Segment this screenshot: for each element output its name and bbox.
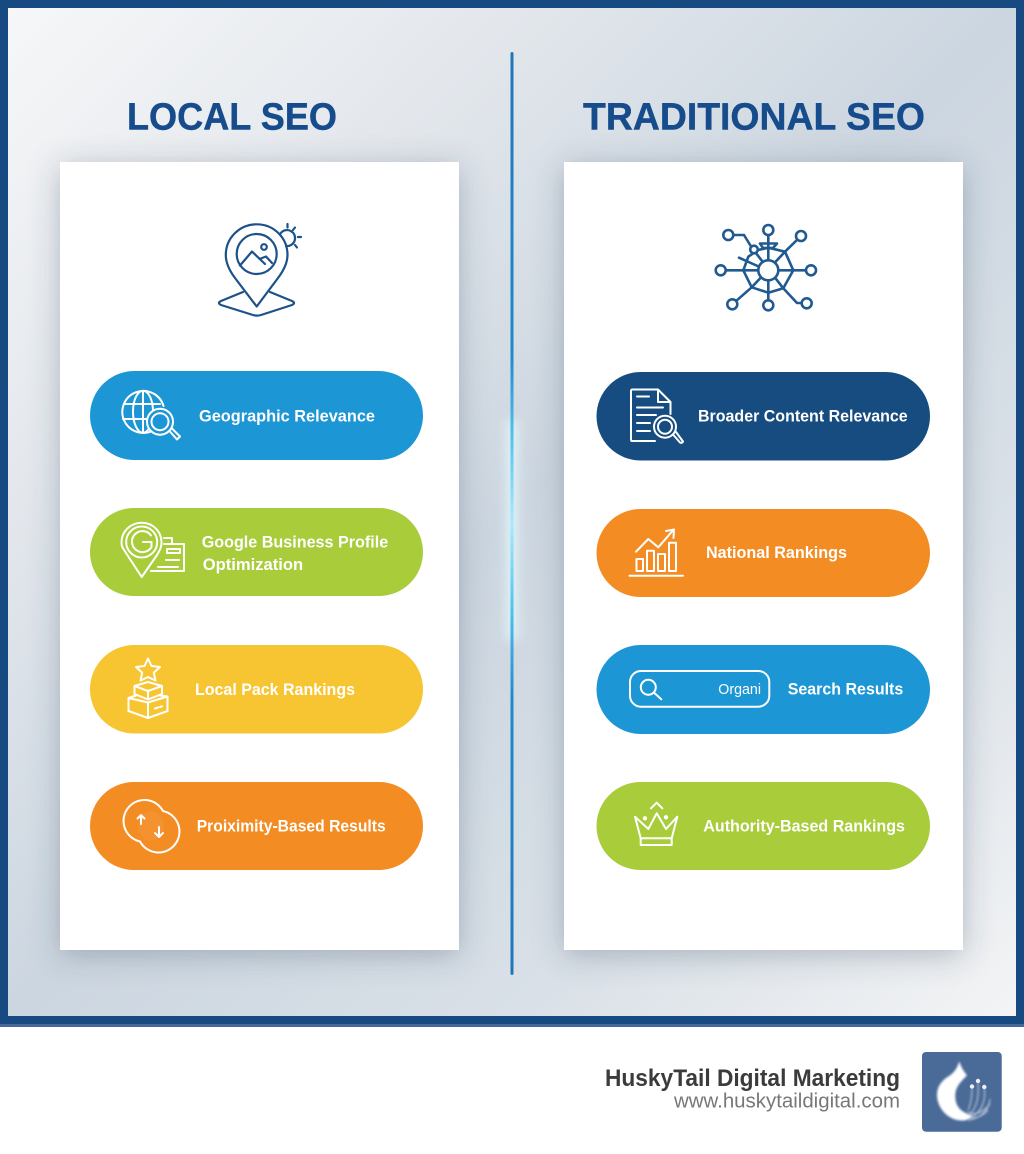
pill: authority-based rankings [596, 782, 930, 870]
icon: network hub [716, 225, 816, 310]
label: Authority-Based Rankings [703, 817, 905, 836]
pill: broader content relevance [596, 372, 930, 460]
pill: local pack rankings [90, 645, 423, 734]
icon: map pin with sun [219, 224, 301, 316]
pill: national rankings [596, 509, 930, 597]
heading: traditional seo: TRADITIONAL SEO [583, 97, 925, 139]
label: Broader Content Relevance [698, 407, 908, 426]
icon: google pin with listing [122, 523, 184, 577]
pill: google business profile optimization [90, 508, 423, 596]
icon: search bar [630, 671, 769, 707]
website: www.huskytaildigital.com [673, 1090, 900, 1112]
heading: local seo: LOCAL SEO [127, 97, 337, 139]
label: Local Pack Rankings [195, 680, 355, 699]
icon: crown [635, 803, 677, 845]
pill: geographic relevance [90, 371, 423, 460]
panel: traditional seo [564, 162, 963, 950]
icon: document with magnifier [631, 390, 683, 443]
pill: organic search results [596, 645, 930, 734]
search bar text: Organi [718, 681, 761, 698]
icon: rising bar chart [630, 530, 683, 576]
pill: proximity-based results [90, 782, 423, 870]
icon: overlapping circles with arrows [124, 800, 179, 853]
panel: local seo [60, 162, 459, 950]
label: National Rankings [706, 543, 847, 562]
footer [605, 1052, 1002, 1132]
label: Proiximity-Based Results [197, 817, 386, 836]
label: Geographic Relevance [199, 406, 375, 426]
icon: globe with magnifier [122, 391, 180, 440]
brand name: HuskyTail Digital Marketing [605, 1065, 900, 1092]
label line 2: Optimization [203, 555, 303, 574]
logo [922, 1052, 1002, 1132]
label: Google Business Profile [202, 532, 388, 551]
icon: star on stacked boxes [128, 658, 168, 718]
label: Search Results [788, 680, 903, 699]
center divider [506, 52, 518, 975]
